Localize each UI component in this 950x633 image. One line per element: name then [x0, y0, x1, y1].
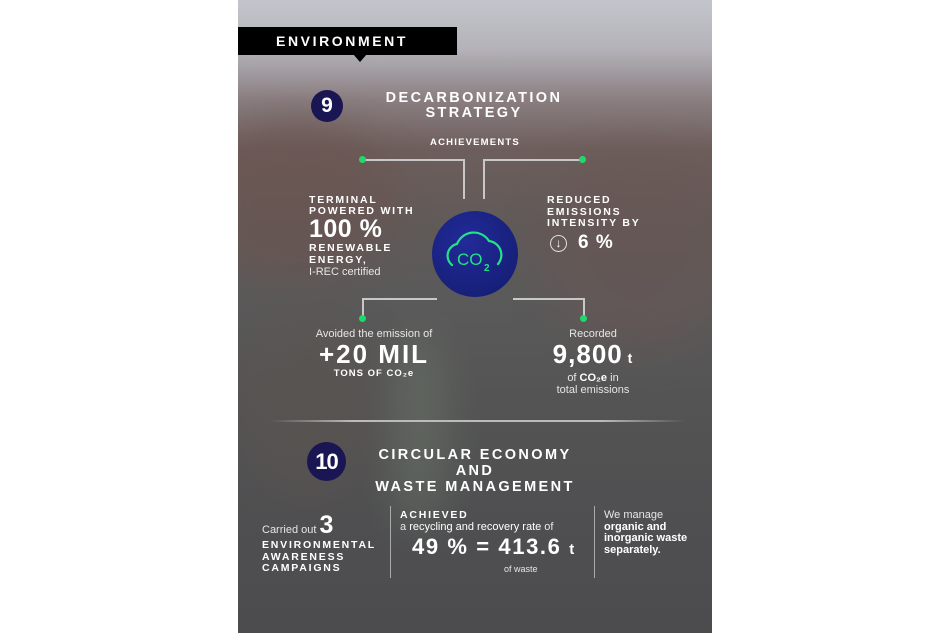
text: terminal powered 100% renewable: RENEWABLE: [309, 242, 392, 254]
text: recorded 9,800 t: Recorded: [569, 328, 617, 340]
text: reduced emissions intensity 6%: 6 %: [578, 232, 614, 252]
text: reduced emissions intensity 6%: INTENSITY BY: [547, 217, 641, 229]
text: organic waste: inorganic waste: [604, 532, 687, 544]
divider: [270, 420, 685, 422]
text: terminal powered 100% renewable: ENERGY,: [309, 254, 368, 266]
title: decarbonization strategy: STRATEGY: [425, 105, 523, 121]
text: recycling rate 49%: of waste: [504, 564, 538, 574]
text: 3 campaigns: AWARENESS: [262, 550, 345, 562]
text: recorded 9,800 t: total emissions: [557, 384, 629, 396]
title: circular economy: WASTE MANAGEMENT: [375, 479, 575, 495]
text: recorded 9,800 t: 9,800 t: [553, 339, 633, 369]
text: recycling rate 49%: ACHIEVED: [400, 509, 469, 521]
text: reduced emissions intensity 6%: EMISSIONS: [547, 206, 621, 218]
text: avoided emission +20 MIL: Avoided the emission of: [316, 328, 432, 340]
vertical dividers: [390, 506, 391, 578]
title: circular economy: AND: [456, 463, 494, 479]
badge 9: [311, 90, 343, 122]
subheading: achievements: ACHIEVEMENTS: [430, 137, 520, 148]
text: avoided emission +20 MIL: +20 MIL: [319, 339, 429, 369]
title: decarbonization strategy: DECARBONIZATION: [386, 90, 562, 106]
title: circular economy: [375, 447, 575, 495]
badge 9: 9: [321, 94, 333, 117]
text: terminal powered 100% renewable: [309, 194, 414, 278]
text: reduced emissions intensity 6%: REDUCED: [547, 194, 611, 206]
badge 10: [307, 442, 346, 481]
icon: CO2 cloud: CO: [457, 250, 482, 269]
text: organic waste: separately.: [604, 544, 661, 556]
text: 3 campaigns: CAMPAIGNS: [262, 562, 341, 574]
title: decarbonization strategy: [386, 90, 562, 121]
text: avoided emission +20 MIL: [316, 328, 432, 379]
text: organic waste: [604, 509, 687, 556]
badge 10: 10: [315, 449, 338, 474]
text: terminal powered 100% renewable: TERMINAL: [309, 194, 378, 206]
banner: environment: [238, 27, 457, 55]
text: 3 campaigns: ENVIRONMENTAL: [262, 539, 376, 551]
icon: CO2 cloud: [432, 211, 518, 297]
text: reduced emissions intensity 6%: [547, 194, 641, 252]
text: reduced emissions intensity 6%: ↓: [556, 236, 562, 250]
text: recycling rate 49%: a recycling and recovery rate of: [400, 521, 553, 533]
text: recorded 9,800 t: of CO₂e in: [567, 372, 619, 384]
text: avoided emission +20 MIL: TONS OF CO₂e: [334, 368, 414, 379]
text: terminal powered 100% renewable: 100 %: [309, 215, 382, 243]
icon: CO2 cloud: 2: [484, 263, 490, 274]
text: terminal powered 100% renewable: POWERED WITH: [309, 205, 414, 217]
text: recycling rate 49%: [400, 509, 576, 574]
text: organic waste: organic and: [604, 520, 666, 532]
banner: environment: ENVIRONMENT: [276, 33, 408, 49]
text: organic waste: We manage: [604, 509, 663, 521]
title: circular economy: CIRCULAR ECONOMY: [378, 447, 572, 463]
text: recorded 9,800 t: [553, 328, 633, 396]
text: 3 campaigns: Carried out 3: [262, 511, 338, 539]
text: terminal powered 100% renewable: I-REC certified: [309, 266, 381, 278]
text: 3 campaigns: [262, 511, 376, 574]
text: recycling rate 49%: 49 % = 413.6 t: [412, 534, 576, 559]
